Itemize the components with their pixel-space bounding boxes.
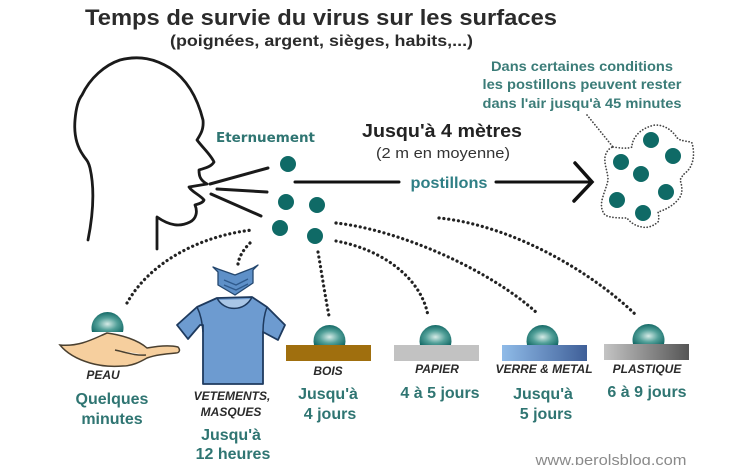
distance heading: Jusqu'à 4 mètres xyxy=(362,120,522,141)
droplet cloud xyxy=(587,115,694,227)
air note: Dans certaines conditions xyxy=(491,58,673,74)
icon: t-shirt xyxy=(177,297,285,384)
surface: wood: BOIS xyxy=(313,364,343,378)
time: peau xyxy=(76,391,149,428)
subtitle: (poignées, argent, sièges, habits,...) xyxy=(170,33,473,50)
surface: glass and metal: VERRE & METAL xyxy=(495,362,593,376)
distance note: (2 m en moyenne) xyxy=(376,145,510,162)
air note: dans l'air jusqu'à 45 minutes xyxy=(482,95,682,111)
icon: sphere on hand xyxy=(92,312,124,332)
time: vetements xyxy=(196,427,270,463)
surface: glass and metal: Jusqu'à xyxy=(513,386,573,403)
surface: plastic: 6 à 9 jours xyxy=(607,384,687,401)
surface: glass and metal: 5 jours xyxy=(520,406,572,423)
surface: plastic xyxy=(604,324,689,401)
air note xyxy=(482,58,682,111)
icon: mask xyxy=(213,265,258,295)
time: peau: Quelques xyxy=(76,391,149,408)
label: vetements: VETEMENTS, xyxy=(194,389,270,403)
surface: paper: 4 à 5 jours xyxy=(400,385,480,402)
sneeze label: Eternuement xyxy=(216,130,316,146)
surface: skin xyxy=(60,312,179,428)
surface: glass and metal xyxy=(495,325,593,423)
surface: wood xyxy=(286,325,371,423)
surface: clothes and masks xyxy=(177,265,285,463)
arrow: postillons xyxy=(295,163,592,201)
icon: head profile xyxy=(75,58,214,249)
label: peau: PEAU xyxy=(86,368,120,382)
label: vetements: MASQUES xyxy=(201,405,261,419)
droplets xyxy=(272,156,325,244)
surface: paper: PAPIER xyxy=(415,362,459,376)
sneeze lines xyxy=(210,168,268,216)
postillons label: postillons xyxy=(410,175,488,192)
time: vetements: 12 heures xyxy=(196,446,270,463)
surface: wood: 4 jours xyxy=(304,406,356,423)
dotted paths to surfaces xyxy=(127,218,637,316)
surface: plastic: PLASTIQUE xyxy=(613,362,682,376)
title: Temps de survie du virus sur les surfaces xyxy=(85,5,557,30)
time: vetements: Jusqu'à xyxy=(201,427,261,444)
label: vetements xyxy=(194,389,270,419)
time: peau: minutes xyxy=(81,411,143,428)
surface: paper xyxy=(394,325,480,402)
air note: les postillons peuvent rester xyxy=(482,76,682,92)
icon: hand xyxy=(60,333,179,366)
surface: wood: Jusqu'à xyxy=(298,386,358,403)
